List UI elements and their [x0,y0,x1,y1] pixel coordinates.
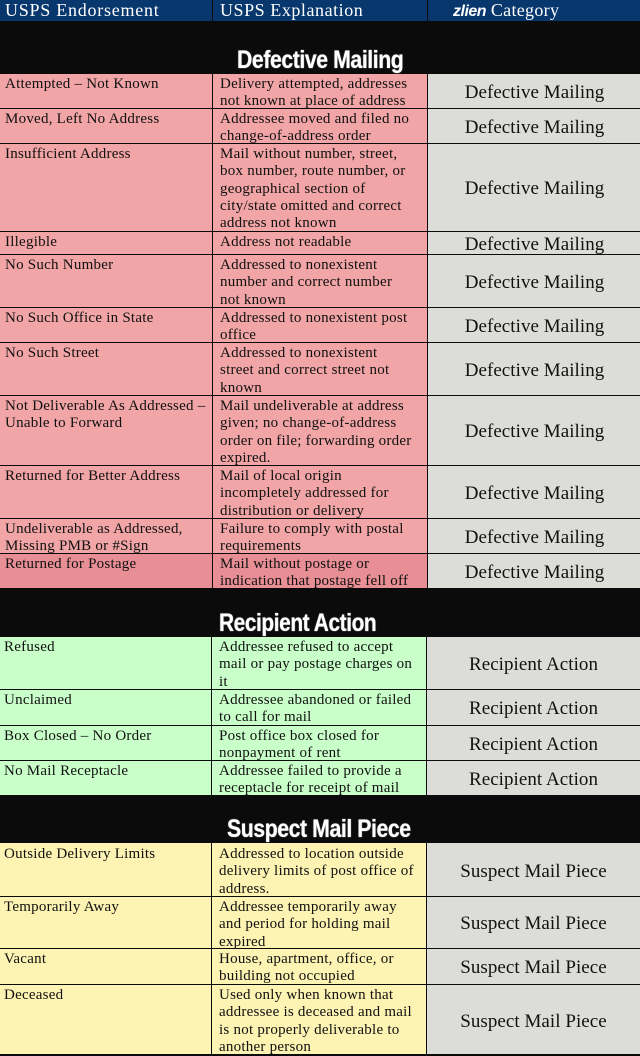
row: Insufficient Address: box number, route number, or [220,163,405,179]
row: Refused: Addressee refused to accept [219,639,393,655]
column heading: USPS Explanation [213,0,427,21]
row: Returned for Better Address: Returned for Better Address [5,468,180,484]
row: Insufficient Address: Mail without number, street, [220,146,397,162]
row: Temporarily Away: Suspect Mail Piece [460,913,607,934]
row: Illegible: Address not readable [220,234,351,250]
row: Returned for Better Address: distribution or delivery [220,503,364,519]
row: Deceased: Used only when known that [219,987,393,1003]
row: Outside Delivery Limits: Suspect Mail Piece [460,861,607,882]
row: No Mail Receptacle [0,761,640,796]
row: No Mail Receptacle: Addressee failed to provide a [219,763,402,779]
row: Returned for Better Address [0,466,640,519]
row: Outside Delivery Limits [0,843,640,897]
panel: recipient action rows [0,637,640,796]
table header [0,0,640,21]
row: Returned for Better Address: Defective Mailing [465,483,604,504]
row: No Such Office in State: Addressed to nonexistent post [220,310,407,326]
row: Illegible: Defective Mailing [465,234,604,255]
row: Refused: Refused [4,639,55,655]
column heading: USPS Endorsement: USPS Endorsement [5,0,160,20]
row: No Such Number: No Such Number [5,257,113,273]
row: Temporarily Away: Addressee temporarily away [219,899,397,915]
row: Not Deliverable As Addressed [0,396,640,466]
row: No Such Street [0,343,640,396]
row: No Such Street: known [220,380,262,396]
row: Moved, Left No Address: Moved, Left No Address [5,111,159,127]
row: No Such Street: Defective Mailing [465,360,604,381]
row: Attempted – Not Known: Delivery attempted, addresses [220,76,407,92]
row: Temporarily Away: and period for holding mail [219,916,390,932]
row: Undeliverable as Addressed [0,519,640,554]
row: Undeliverable as Addressed: Defective Mailing [465,527,604,548]
row: Illegible: Illegible [5,234,57,250]
row: Not Deliverable As Addressed: expired. [220,450,271,466]
row: Refused: mail or pay postage charges on [219,656,412,672]
row: Box Closed – No Order [0,726,640,761]
row: Deceased [0,985,640,1055]
row: Returned for Postage: Returned for Postage [5,556,136,572]
row: Insufficient Address [0,144,640,231]
row: Not Deliverable As Addressed: given; no change-of-address [220,415,396,431]
row: Attempted – Not Known: not known at place of address [220,93,406,109]
row: Box Closed – No Order: Recipient Action [469,734,598,755]
row: Vacant [0,949,640,984]
row: Unclaimed [0,690,640,725]
row: Moved, Left No Address: Defective Mailing [465,117,604,138]
row: No Such Number: not known [220,292,286,308]
row: Returned for Postage: indication that postage fell off [220,573,408,589]
row: Temporarily Away: expired [219,934,266,950]
row: Box Closed – No Order: Post office box closed for [219,728,379,744]
row: Undeliverable as Addressed: Failure to comply with postal [220,521,404,537]
row: Insufficient Address: Insufficient Address [5,146,131,162]
row: Outside Delivery Limits: Outside Delivery Limits [4,846,155,862]
row: Box Closed – No Order: nonpayment of rent [219,745,341,761]
row: No Such Street: Addressed to nonexistent [220,345,377,361]
row: Unclaimed: to call for mail [219,709,312,725]
row: No Such Number: Addressed to nonexistent [220,257,377,273]
row: No Such Office in State: office [220,327,256,343]
row: No Such Number: number and correct number [220,274,392,290]
row: Undeliverable as Addressed: Undeliverable as Addressed, [5,521,183,537]
row: Attempted – Not Known [0,74,640,109]
row: No Such Street: street and correct street not [220,362,389,378]
row: No Mail Receptacle: Recipient Action [469,769,598,790]
section heading: Defective Mailing: Defective Mailing [237,46,403,74]
panel: suspect mail piece rows [0,843,640,1055]
row: Vacant: Vacant [4,951,46,967]
row: No Mail Receptacle: receptacle for receipt of mail [219,780,399,796]
row: No Such Office in State [0,308,640,343]
row: Returned for Postage [0,554,640,589]
row: Outside Delivery Limits: address. [219,881,270,897]
row: No Such Office in State: No Such Office in State [5,310,154,326]
row: Unclaimed: Recipient Action [469,698,598,719]
row: Unclaimed: Addressee abandoned or failed [219,692,411,708]
row: Vacant: House, apartment, office, or [219,951,394,967]
row: Insufficient Address: address not known [220,215,337,231]
row: Outside Delivery Limits: Addressed to location outside [219,846,404,862]
column heading: USPS Explanation: USPS Explanation [220,0,363,20]
row: Not Deliverable As Addressed: Unable to Forward [5,415,122,431]
row: Deceased: Suspect Mail Piece [460,1011,607,1032]
row: Attempted – Not Known: Defective Mailing [465,82,604,103]
row: No Such Street: No Such Street [5,345,99,361]
row: Insufficient Address: geographical section of [220,181,365,197]
row: Deceased: Deceased [4,987,63,1003]
row: Returned for Better Address: incompletely addressed for [220,485,389,501]
row: Moved, Left No Address: change-of-address order [220,128,371,144]
row: Returned for Postage: Mail without postage or [220,556,369,572]
row: Illegible [0,232,640,255]
row: Attempted – Not Known: Attempted – Not Known [5,76,159,92]
row: Undeliverable as Addressed: requirements [220,538,301,554]
section heading: Recipient Action: Recipient Action [219,609,376,637]
panel: defective mailing rows [0,74,640,589]
row: Moved, Left No Address: Addressee moved and filed no [220,111,409,127]
column heading: USPS Endorsement [0,0,212,21]
row: Not Deliverable As Addressed: Not Deliverable As Addressed – [5,398,206,414]
row: Undeliverable as Addressed: Missing PMB or #Sign [5,538,149,554]
row: Deceased: addressee is deceased and mail [219,1004,412,1020]
row: Refused: it [219,674,228,690]
column heading: zlien Category [428,0,640,21]
row: No Mail Receptacle: No Mail Receptacle [4,763,128,779]
row: Returned for Better Address: Mail of local origin [220,468,342,484]
column heading: zlien Category: zlien Category [453,0,559,20]
row: Not Deliverable As Addressed: Defective Mailing [465,421,604,442]
row: Insufficient Address: Defective Mailing [465,178,604,199]
row: No Such Number [0,255,640,308]
section heading: Suspect Mail Piece: Suspect Mail Piece [227,815,411,843]
row: No Such Number: Defective Mailing [465,272,604,293]
row: Not Deliverable As Addressed: Mail undeliverable at address [220,398,404,414]
row: Moved, Left No Address [0,109,640,144]
row: Not Deliverable As Addressed: order on file; forwarding order [220,433,412,449]
row: Temporarily Away: Temporarily Away [4,899,119,915]
row: Deceased: another person [219,1039,311,1055]
row: No Such Office in State: Defective Mailing [465,316,604,337]
row: Vacant: Suspect Mail Piece [460,957,607,978]
row: Insufficient Address: city/state omitted and correct [220,198,402,214]
row: Temporarily Away [0,897,640,950]
row: Outside Delivery Limits: delivery limits of post office of [219,863,414,879]
row: Unclaimed: Unclaimed [4,692,72,708]
row: Vacant: building not occupied [219,968,355,984]
row: Returned for Postage: Defective Mailing [465,562,604,583]
row: Refused [0,637,640,690]
row: Refused: Recipient Action [469,654,598,675]
row: Box Closed – No Order: Box Closed – No Order [4,728,152,744]
row: Deceased: is not properly deliverable to [219,1022,399,1038]
